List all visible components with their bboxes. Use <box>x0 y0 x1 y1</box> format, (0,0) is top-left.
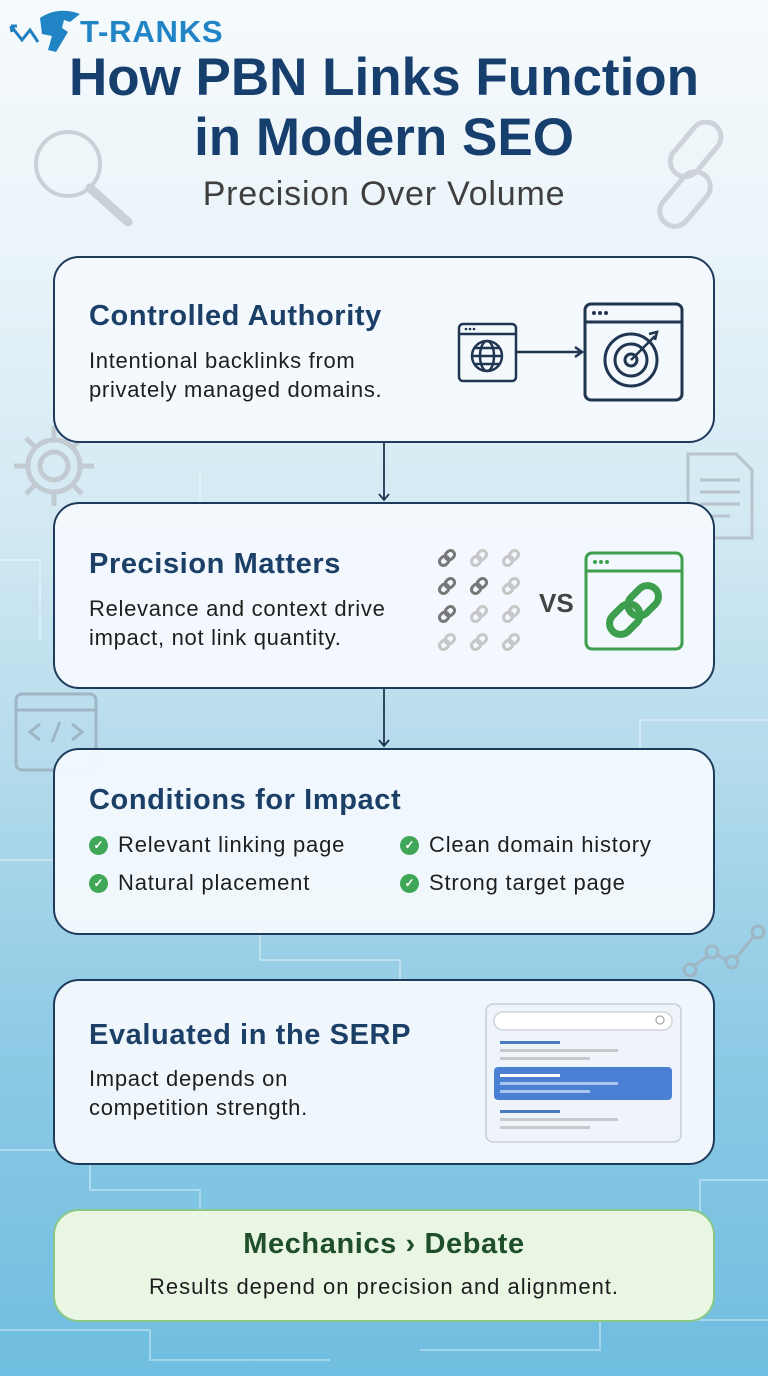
text: Impact depends on <box>89 1066 288 1091</box>
icon: gear decoration <box>14 426 94 506</box>
checklist <box>89 832 652 895</box>
arrow: connector 2 <box>378 689 390 748</box>
heading: Conditions for Impact <box>89 784 401 816</box>
logo: T-RANKS <box>80 14 223 49</box>
item: ✓ <box>404 838 415 852</box>
text: Relevance and context drive <box>89 596 386 621</box>
heading: Controlled Authority <box>89 300 382 332</box>
heading: Evaluated in the SERP <box>89 1019 411 1051</box>
panel: conditions for impact <box>53 748 715 935</box>
heading: Mechanics › Debate <box>243 1228 525 1260</box>
text: impact, not link quantity. <box>89 625 342 650</box>
text: privately managed domains. <box>89 377 382 402</box>
icon: serp mockup <box>485 1003 682 1143</box>
text <box>89 596 386 650</box>
item: ✓ <box>404 876 415 890</box>
text <box>89 1066 308 1120</box>
panel: conclusion <box>53 1209 715 1322</box>
icon: document decoration <box>686 452 754 540</box>
item: ✓ <box>93 876 104 890</box>
icon: line chart decoration <box>682 924 766 978</box>
arrow: connector 1 <box>378 443 390 502</box>
icon: magnifier decoration <box>34 130 132 226</box>
text <box>89 348 382 402</box>
item: Relevant linking page <box>118 832 345 857</box>
subtitle: Precision Over Volume <box>203 175 565 213</box>
icon: code window decoration <box>14 692 98 772</box>
item: Natural placement <box>118 870 310 895</box>
panel: evaluated in serp <box>53 979 715 1165</box>
icon: website to target <box>458 302 684 402</box>
icon: many links vs one link <box>438 549 684 651</box>
item: Strong target page <box>429 870 626 895</box>
text: competition strength. <box>89 1095 308 1120</box>
title: How PBN Links Function <box>69 48 699 107</box>
heading: Precision Matters <box>89 548 341 580</box>
text: Intentional backlinks from <box>89 348 355 373</box>
panel: precision matters <box>53 502 715 689</box>
text: Results depend on precision and alignment. <box>149 1274 619 1299</box>
logo <box>10 10 223 52</box>
icon: many links vs one link: VS <box>539 588 574 618</box>
item: Clean domain history <box>429 832 652 857</box>
title: in Modern SEO <box>194 108 574 167</box>
title <box>69 48 699 167</box>
panel: controlled authority <box>53 256 715 443</box>
icon: chain decoration <box>657 120 724 229</box>
item: ✓ <box>93 838 104 852</box>
